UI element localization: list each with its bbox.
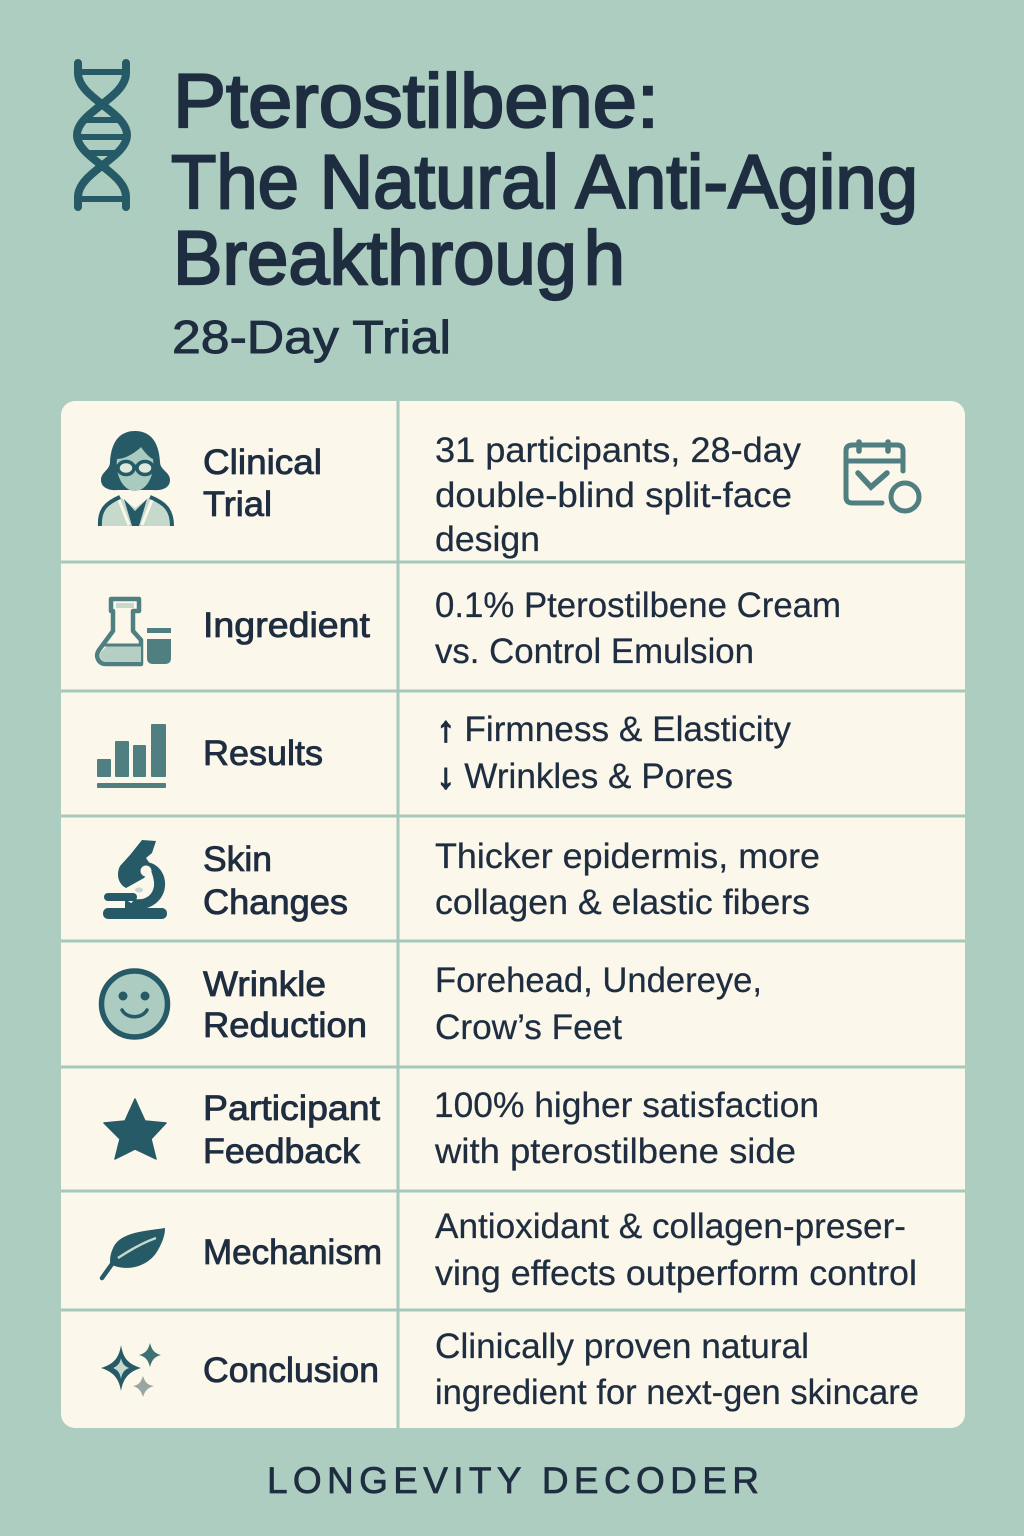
description: 100% higher satisfaction — [434, 1086, 819, 1125]
icon: microscope — [103, 840, 167, 919]
row: Mechanism — [102, 1207, 917, 1293]
label: Conclusion — [203, 1350, 379, 1390]
label: Skin — [203, 839, 272, 879]
row: Participant Feedback: with pterostilbene side — [434, 1132, 796, 1171]
row: Results — [97, 710, 792, 796]
row: Participant Feedback: Feedback — [203, 1131, 360, 1171]
row: Clinical Trial: double-blind split-face — [435, 476, 792, 515]
icon: bar chart — [97, 724, 166, 788]
row: Skin Changes — [103, 837, 820, 922]
icon: leaf — [102, 1228, 165, 1278]
description: Clinically proven natural — [435, 1327, 809, 1366]
subtitle: 28-Day Trial — [172, 311, 451, 363]
row: Participant Feedback — [104, 1086, 819, 1171]
icon: DNA helix — [76, 63, 128, 207]
label: Clinical — [203, 442, 322, 482]
row: Wrinkle Reduction: Reduction — [203, 1005, 367, 1045]
title — [171, 59, 918, 301]
label: Results — [203, 733, 323, 773]
description: Thicker epidermis, more — [435, 837, 820, 876]
panel: trial summary table — [61, 401, 965, 1428]
row: Wrinkle Reduction — [102, 961, 762, 1047]
icon: flask and jar — [97, 599, 171, 664]
row: Clinical Trial — [100, 431, 919, 559]
icon: smiling face — [102, 971, 168, 1037]
icon: star — [104, 1099, 166, 1159]
description: ↑ Firmness & Elasticity — [437, 710, 792, 749]
title: The Natural Anti-Aging — [171, 140, 918, 225]
description: Forehead, Undereye, — [435, 961, 762, 1000]
row: Skin Changes: collagen & elastic fibers — [435, 883, 810, 922]
row: Wrinkle Reduction: Crow’s Feet — [435, 1008, 622, 1047]
row: Ingredient: vs. Control Emulsion — [435, 632, 754, 671]
description: 0.1% Pterostilbene Cream — [435, 586, 841, 625]
icon: scientist — [100, 431, 172, 526]
footer brand: LONGEVITY DECODER — [267, 1460, 759, 1501]
label: Wrinkle — [203, 964, 326, 1004]
label: Mechanism — [203, 1232, 382, 1272]
row: Conclusion — [101, 1327, 919, 1412]
title: Pterostilbene: — [173, 59, 659, 144]
row: Skin Changes: Changes — [203, 882, 348, 922]
icon: calendar check — [846, 442, 919, 511]
label: Ingredient — [203, 605, 370, 645]
row: Clinical Trial: Trial — [203, 484, 272, 524]
row: Ingredient — [97, 586, 841, 671]
row: Results: ↓ Wrinkles & Pores — [437, 757, 733, 796]
label: Participant — [203, 1088, 380, 1128]
icon: sparkles — [101, 1343, 161, 1397]
title: Breakthrough — [173, 216, 625, 301]
row: Conclusion: ingredient for next-gen skincare — [435, 1373, 919, 1412]
row: Clinical Trial: design — [435, 520, 540, 559]
row: Mechanism: ving effects outperform control — [435, 1254, 917, 1293]
description: 31 participants, 28-day — [435, 431, 802, 470]
description: Antioxidant & collagen-preser- — [435, 1207, 906, 1246]
